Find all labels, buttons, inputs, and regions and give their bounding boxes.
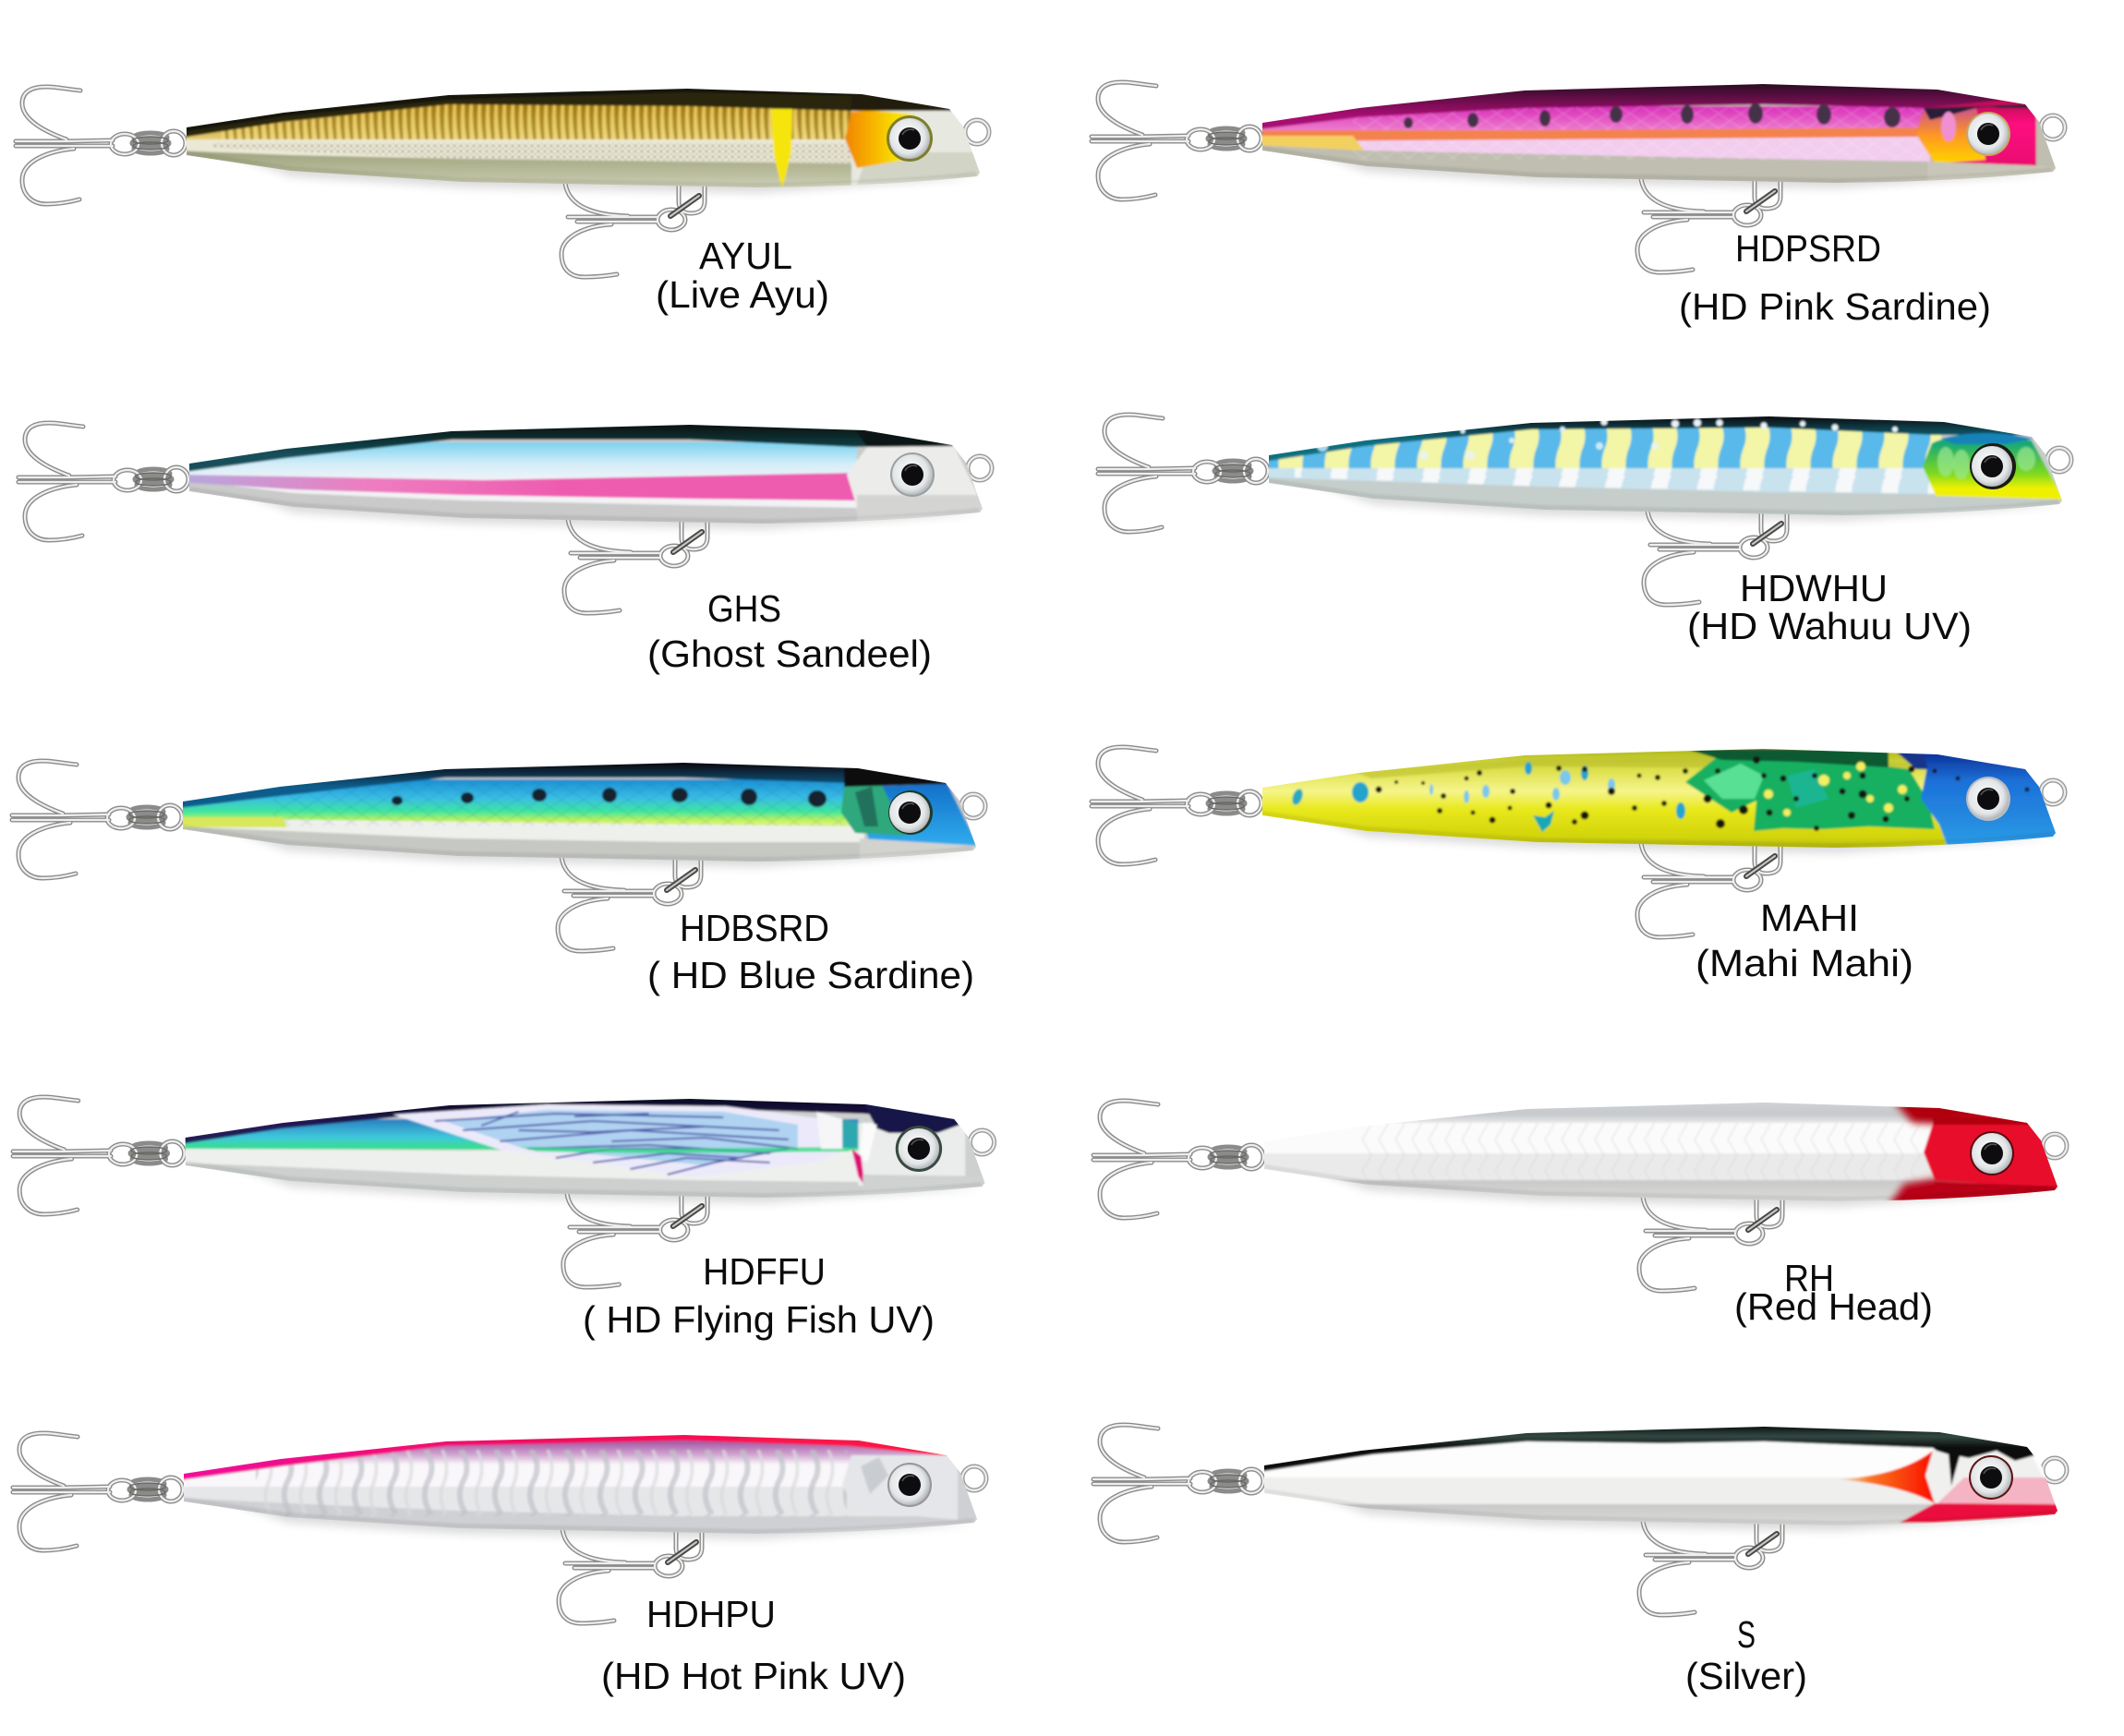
body paint: red head: [1264, 1103, 2058, 1201]
nose line tie: [2043, 1134, 2067, 1158]
nose line tie: [962, 1466, 986, 1490]
label: HDHPU: (HD Hot Pink UV): [601, 1655, 906, 1697]
panel: MAHI Mahi Mahi: [1092, 743, 2065, 984]
panel: HDWHU HD Wahuu UV: [1098, 411, 2071, 647]
eye: [896, 1126, 942, 1172]
nose line tie: [2043, 1458, 2067, 1482]
eye: [1970, 1131, 2014, 1175]
body paint: pink sardine: [1262, 84, 2056, 183]
body paint: live ayu gold: [187, 89, 980, 187]
nose line tie: [2041, 115, 2065, 139]
lure: RH: [1093, 1092, 2067, 1291]
label: S: [1685, 1613, 1807, 1697]
belly treble hook: [1639, 1197, 1782, 1291]
body paint: hot pink mackerel: [184, 1435, 977, 1534]
label: AYUL: (Live Ayu): [656, 273, 829, 316]
rear treble hook: [13, 1433, 183, 1550]
label: HDFFU: [583, 1250, 935, 1341]
body paint: wahoo stripes: [1269, 416, 2062, 515]
rear treble hook: [18, 423, 188, 540]
label: HDPSRD: [1679, 227, 1991, 328]
label: RH: (Red Head): [1734, 1285, 1933, 1328]
rear treble hook: [1092, 82, 1261, 199]
panel: GHS Ghost Sandeel: [18, 419, 992, 675]
nose line tie: [961, 794, 985, 818]
label: AYUL: AYUL: [699, 235, 792, 277]
label: MAHI: MAHI: [1760, 897, 1859, 939]
lure: S: [1093, 1421, 2067, 1615]
label: AYUL: [656, 235, 829, 316]
rear treble hook: [1098, 415, 1268, 532]
label: HDWHU: [1687, 567, 1972, 647]
label: MAHI: (Mahi Mahi): [1696, 942, 1913, 984]
rear treble hook: [12, 761, 182, 878]
label: HDWHU: HDWHU: [1740, 567, 1888, 609]
belly treble hook: [559, 1529, 702, 1623]
label: HDHPU: HDHPU: [646, 1593, 776, 1635]
nose line tie: [968, 456, 992, 480]
body paint: silver: [1264, 1427, 2058, 1525]
label: HDPSRD: HDPSRD: [1735, 227, 1881, 270]
belly treble hook: [558, 857, 701, 951]
panel: S Silver: [1093, 1421, 2067, 1697]
eye: [1969, 1455, 2013, 1500]
rear treble hook: [1092, 747, 1261, 864]
eye: [1966, 112, 2010, 156]
panel: HDPSRD HD Pink Sardine: [1092, 78, 2065, 328]
label: HDBSRD: ( HD Blue Sardine): [647, 954, 974, 996]
lure: HDPSRD: [1092, 78, 2065, 272]
belly treble hook: [561, 183, 705, 277]
panel: HDFFU HD Flying Fish UV: [13, 1093, 995, 1341]
lure: AYUL: [16, 83, 989, 277]
belly treble hook: [1637, 178, 1780, 272]
belly treble hook: [1644, 511, 1787, 605]
eye: [887, 115, 933, 162]
label: S: S: [1737, 1613, 1756, 1656]
body paint: flying fish: [185, 1099, 984, 1198]
lure: MAHI: [1092, 743, 2065, 937]
panel: HDHPU HD Hot Pink UV: [13, 1429, 986, 1697]
label: HDBSRD: HDBSRD: [680, 907, 829, 949]
lure: HDWHU: [1098, 411, 2071, 605]
label: HDPSRD: (HD Pink Sardine): [1679, 285, 1991, 328]
rear treble hook: [13, 1097, 185, 1214]
panel: AYUL Live Ayu: [16, 83, 989, 316]
label: HDWHU: (HD Wahuu UV): [1687, 605, 1972, 647]
label: S: (Silver): [1685, 1655, 1807, 1697]
label: RH: [1734, 1257, 1933, 1328]
rear treble hook: [16, 87, 186, 204]
panel: HDBSRD HD Blue Sardine: [12, 757, 985, 996]
eye: [1966, 777, 2010, 821]
nose line tie: [965, 120, 989, 144]
belly treble hook: [1639, 1521, 1782, 1615]
belly treble hook: [1637, 843, 1780, 937]
rear treble hook: [1093, 1101, 1263, 1218]
nose line tie: [970, 1130, 995, 1154]
nose line tie: [2047, 448, 2071, 472]
eye: [890, 452, 935, 497]
eye: [1970, 443, 2016, 489]
label: GHS: [647, 587, 932, 675]
label: RH: RH: [1784, 1257, 1834, 1299]
label: HDBSRD: [647, 907, 974, 996]
nose line tie: [2041, 780, 2065, 804]
label: HDFFU: HDFFU: [703, 1250, 826, 1293]
label: GHS: GHS: [707, 587, 781, 630]
lure: GHS: [18, 419, 992, 613]
rear treble hook: [1093, 1425, 1263, 1542]
belly treble hook: [563, 1193, 707, 1287]
label: MAHI: [1696, 897, 1913, 984]
body paint: mahi mahi: [1262, 749, 2056, 848]
eye: [888, 790, 933, 835]
label: HDFFU: ( HD Flying Fish UV): [583, 1298, 935, 1341]
belly treble hook: [564, 519, 707, 613]
body paint: blue sardine: [183, 763, 976, 862]
panel: RH Red Head: [1093, 1092, 2067, 1328]
lure: HDFFU: [13, 1093, 995, 1287]
lure: HDBSRD: [12, 757, 985, 951]
label: HDHPU: [601, 1593, 906, 1697]
eye: [887, 1463, 932, 1507]
body paint: ghost sandeel: [189, 425, 983, 524]
label: GHS: (Ghost Sandeel): [647, 633, 932, 675]
lure: HDHPU: [13, 1429, 986, 1623]
